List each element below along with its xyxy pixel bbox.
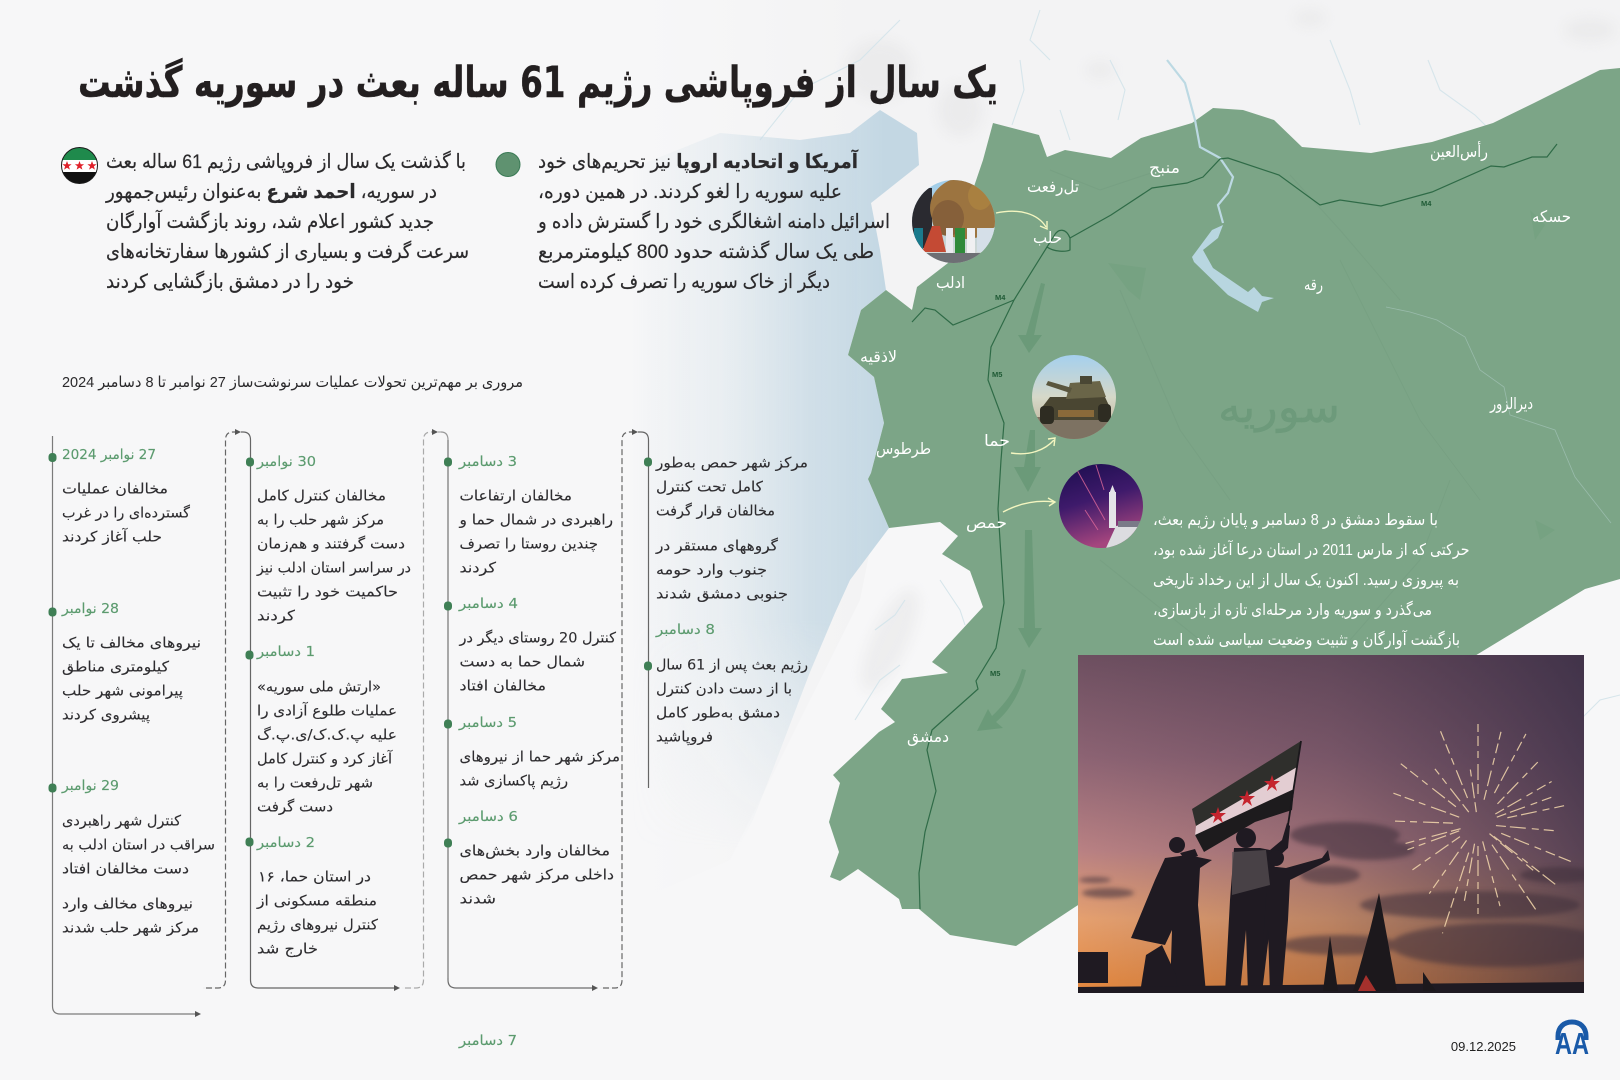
event: 3 December: راهبردی در شمال حما و bbox=[458, 512, 613, 528]
map labels: cities: حسکه bbox=[1532, 207, 1571, 226]
event: 7 December text: جنوبی دمشق شدند bbox=[656, 586, 788, 602]
arrowhead: Aleppo bbox=[1040, 221, 1047, 229]
event: 5 December: رژیم پاکسازی شد bbox=[460, 774, 568, 790]
road labels: M5 bbox=[990, 669, 1000, 678]
event: 30 November bbox=[246, 454, 411, 624]
terrain patches inside Syria bbox=[1108, 210, 1555, 540]
timeline column 1 bbox=[48, 447, 215, 936]
event: 28 November bbox=[48, 601, 201, 724]
event: 3 December: چندین روستا را تصرف bbox=[460, 536, 598, 552]
photo circle: Homs clock tower at night bbox=[1058, 463, 1144, 549]
road labels bbox=[990, 199, 1432, 678]
map labels: cities: منبج bbox=[1149, 158, 1180, 177]
map: Syria and surroundings bbox=[600, 0, 1620, 946]
logo: Anadolu Agency: AA bbox=[1555, 1026, 1589, 1061]
timeline column 4 bbox=[644, 456, 808, 746]
subtitle: timeline intro: مروری بر مهم‌ترین تحولات عملیات سرنوشت‌ساز 27 نوامبر تا 8 دسامبر 2024 bbox=[62, 374, 523, 391]
icon: green legend dot bbox=[496, 152, 520, 176]
text block: right paragraph: علیه سوریه را لغو کردند. در همین دوره، bbox=[538, 181, 842, 203]
flag bbox=[1192, 741, 1301, 852]
map label: country name: سوریه bbox=[1218, 382, 1340, 433]
photo circle: tank bbox=[1030, 355, 1118, 440]
fireworks bbox=[1393, 724, 1571, 933]
event: 29 November: سراقب در استان ادلب به bbox=[62, 838, 215, 854]
event: 2 December: خارج شد bbox=[257, 942, 318, 958]
text block: left paragraph: با گذشت یک سال از فروپاشی رژیم 61 ساله بعث bbox=[106, 150, 466, 173]
text block: right paragraph: اسرائیل دامنه اشغالگری خود را گسترش داده و bbox=[537, 210, 890, 233]
event: 7 December text bbox=[655, 538, 788, 602]
arrow: Homs label to night photo bbox=[1003, 501, 1054, 512]
road labels: M5 bbox=[992, 370, 1002, 379]
event: 4 December bbox=[444, 596, 616, 694]
clouds bbox=[1079, 822, 1610, 967]
event: 1 December: شهر تل‌رفعت را به bbox=[257, 776, 373, 792]
event: 6 December continued bbox=[644, 456, 808, 520]
event: 30 November: کردند bbox=[257, 608, 295, 624]
event: 6 December continued: کامل تحت کنترل bbox=[656, 480, 763, 496]
text block: right paragraph bbox=[537, 149, 890, 293]
event: 1 December: آغاز کرد و کنترل کامل bbox=[257, 750, 393, 768]
event: 6 December: شدند bbox=[460, 892, 496, 908]
roads: M4 and M5 highways bbox=[912, 144, 1557, 909]
event: 6 December: 6 دسامبر bbox=[458, 809, 518, 825]
event: 5 December bbox=[444, 715, 620, 790]
road labels: M4 bbox=[1421, 199, 1432, 208]
text block: left paragraph: جدید کشور اعلام شد، روند بازگشت آوارگان bbox=[106, 209, 434, 233]
event: 2 December: منطقه مسکونی از bbox=[256, 894, 377, 910]
arrow: Hama label to tank photo bbox=[1011, 440, 1054, 454]
event: 6 December continued: مرکز شهر حمص به‌طور bbox=[655, 456, 808, 472]
event: 29 November: 29 نوامبر bbox=[61, 778, 119, 794]
event: 2 December: در استان حما، ۱۶ bbox=[258, 870, 371, 886]
map labels: cities: حما bbox=[984, 431, 1010, 450]
event: 29 November: کنترل شهر راهبردی bbox=[62, 814, 181, 830]
event: 28 November: پیرامونی شهر حلب bbox=[62, 684, 183, 700]
event: 28 November: نیروهای مخالف تا یک bbox=[62, 636, 201, 652]
map labels: cities: تل‌رفعت bbox=[1027, 177, 1079, 197]
event: 6 December bbox=[444, 809, 614, 908]
event: 7 December text: جنوب وارد حومه bbox=[656, 562, 767, 578]
text block: right paragraph: طی یک سال گذشته حدود 800 کیلومترمربع bbox=[538, 240, 874, 263]
text block: right paragraph: دیگر از خاک سوریه را تصرف کرده است bbox=[538, 270, 830, 293]
event: 28 November: پیشروی کردند bbox=[62, 708, 150, 724]
text block: left paragraph bbox=[105, 150, 469, 293]
event: 29 November: مرکز شهر حلب شدند bbox=[62, 920, 199, 936]
photo circle: Aleppo sign bbox=[912, 180, 995, 263]
event: 29 November bbox=[48, 778, 215, 936]
event: 27 November: 27 نوامبر 2024 bbox=[62, 447, 156, 463]
event: 2 December: 2 دسامبر bbox=[256, 835, 315, 851]
event: 3 December: کردند bbox=[460, 560, 496, 576]
sea bbox=[678, 110, 919, 778]
event: 27 November: مخالفان عملیات bbox=[62, 482, 168, 498]
event: 8 December bbox=[644, 622, 808, 746]
event: 29 November: دست مخالفان افتاد bbox=[62, 862, 189, 878]
map labels: cities: لاذقیه bbox=[860, 347, 897, 366]
timeline column 3 bbox=[444, 454, 620, 908]
text block: left paragraph: در سوریه، احمد شرع به‌عنوان رئیس‌جمهور bbox=[105, 181, 437, 203]
event: 5 December: مرکز شهر حما از نیروهای bbox=[460, 750, 620, 766]
event: 27 November bbox=[48, 447, 190, 546]
text block: left paragraph: سرعت گرفت و بسیاری از کشورها سفارتخانه‌های bbox=[106, 240, 469, 263]
text block: map summary bbox=[1153, 512, 1470, 650]
event: 8 December: دمشق به‌طور کامل bbox=[656, 706, 780, 722]
event: 8 December: رژیم بعث پس از 61 سال bbox=[656, 658, 808, 674]
event: 4 December: مخالفان افتاد bbox=[460, 678, 546, 694]
event: 7 December text: گروههای مستقر در bbox=[655, 538, 778, 554]
logo: Anadolu Agency bbox=[1555, 1022, 1589, 1061]
text block: map summary: با سقوط دمشق در 8 دسامبر و پایان رژیم بعث، bbox=[1153, 512, 1438, 530]
map labels: cities: دمشق bbox=[907, 727, 949, 747]
event: 1 December: عملیات طلوع آزادی را bbox=[257, 702, 397, 720]
timeline arrowheads bbox=[195, 429, 638, 1017]
event: 3 December bbox=[444, 454, 613, 576]
event: 29 November: نیروهای مخالف وارد bbox=[62, 896, 193, 912]
text block: right paragraph: آمریکا و اتحادیه اروپا نیز تحریم‌های خود bbox=[538, 149, 859, 173]
text block: map summary: حرکتی که از مارس 2011 در استان درعا آغاز شده بود، bbox=[1153, 540, 1470, 560]
event: 30 November: مرکز شهر حلب را به bbox=[257, 512, 384, 528]
map labels: cities: ادلب bbox=[936, 273, 965, 292]
event: 8 December: فروپاشید bbox=[656, 730, 713, 746]
event: 6 December: مخالفان وارد بخش‌های bbox=[460, 844, 610, 860]
date label: 7 December: 7 دسامبر bbox=[458, 1033, 517, 1049]
small flags bbox=[1324, 893, 1431, 985]
event: 1 December: علیه پ.ک.ک/ی.پ.گ bbox=[257, 726, 397, 744]
event: 28 November: 28 نوامبر bbox=[61, 601, 119, 617]
map labels: cities: رأس‌العین bbox=[1430, 141, 1488, 162]
event: 28 November: کیلومتری مناطق bbox=[62, 660, 169, 676]
text block: map summary: به پیروزی رسید. اکنون یک سال از این رخداد تاریخی bbox=[1153, 572, 1459, 590]
event: 2 December bbox=[246, 835, 378, 958]
title: یک سال از فروپاشی رژیم 61 ساله بعث در سوریه گذشت bbox=[78, 57, 998, 108]
event: 3 December: 3 دسامبر bbox=[458, 454, 517, 470]
timeline column 2 bbox=[246, 454, 411, 958]
event: 5 December: 5 دسامبر bbox=[458, 715, 517, 731]
event: 30 November: 30 نوامبر bbox=[256, 454, 316, 470]
text block: left paragraph: خود را در دمشق بازگشایی کردند bbox=[106, 270, 354, 293]
event: 30 November: در سراسر استان ادلب نیز bbox=[256, 560, 411, 576]
silhouettes: people bbox=[1078, 823, 1584, 993]
event: 8 December: 8 دسامبر bbox=[655, 622, 715, 638]
event: 30 November: مخالفان کنترل کامل bbox=[257, 488, 386, 504]
map labels: cities: رقه bbox=[1304, 275, 1323, 295]
dashed connector overlays bbox=[203, 432, 638, 988]
map labels: cities: طرطوس bbox=[876, 439, 931, 459]
map labels: cities: دیرالزور bbox=[1489, 394, 1533, 414]
photo: crowd with flag and fireworks bbox=[1078, 655, 1610, 993]
event: 4 December: شمال حما به دست bbox=[460, 654, 585, 670]
event: 6 December continued: مخالفان قرار گرفت bbox=[656, 502, 775, 520]
icon: Syrian flag bbox=[61, 147, 98, 185]
event: 27 November: حلب آغاز کردند bbox=[62, 528, 162, 546]
event: 2 December: کنترل نیروهای رژیم bbox=[257, 918, 378, 934]
road labels: M4 bbox=[995, 293, 1006, 302]
terrain: neighbouring land bbox=[640, 0, 1620, 900]
text block: map summary: بازگشت آوارگان و تثبیت وضعیت سیاسی شده است bbox=[1153, 630, 1460, 650]
event: 8 December: با از دست دادن کنترل bbox=[656, 682, 792, 698]
event: 4 December: کنترل 20 روستای دیگر در bbox=[459, 630, 616, 646]
arrows: advance direction bbox=[977, 283, 1045, 731]
map labels: cities: حلب bbox=[1033, 228, 1062, 247]
event: 6 December: داخلی مرکز شهر حمص bbox=[460, 868, 614, 884]
map labels: cities: حمص bbox=[966, 513, 1007, 533]
vest highlight bbox=[1232, 850, 1270, 895]
timeline connectors bbox=[52, 432, 648, 1014]
Syria territory bbox=[829, 68, 1620, 946]
river: Euphrates and Lake Assad bbox=[1167, 60, 1611, 523]
event: 1 December bbox=[246, 644, 397, 816]
arrow: Aleppo photo to city bbox=[996, 211, 1046, 227]
event: 30 November: دست گرفتند و هم‌زمان bbox=[257, 536, 405, 552]
arrowhead: Homs bbox=[1048, 498, 1055, 506]
event: 3 December: مخالفان ارتفاعات bbox=[460, 488, 572, 504]
event: 1 December: دست گرفت bbox=[257, 798, 333, 816]
event: 1 December: 1 دسامبر bbox=[256, 644, 315, 660]
event: 1 December: «ارتش ملی سوریه» bbox=[257, 680, 381, 696]
map labels: cities bbox=[860, 141, 1571, 747]
arrowhead: Hama bbox=[1048, 438, 1055, 446]
text block: map summary: می‌گذرد و سوریه وارد مرحله‌ای تازه از بازسازی، bbox=[1153, 600, 1432, 620]
event: 30 November: حاکمیت خود را تثبیت bbox=[257, 584, 398, 600]
event: 4 December: 4 دسامبر bbox=[458, 596, 518, 612]
event: 27 November: گسترده‌ای را در غرب bbox=[62, 504, 190, 522]
date stamp: 09.12.2025 bbox=[1451, 1039, 1516, 1054]
